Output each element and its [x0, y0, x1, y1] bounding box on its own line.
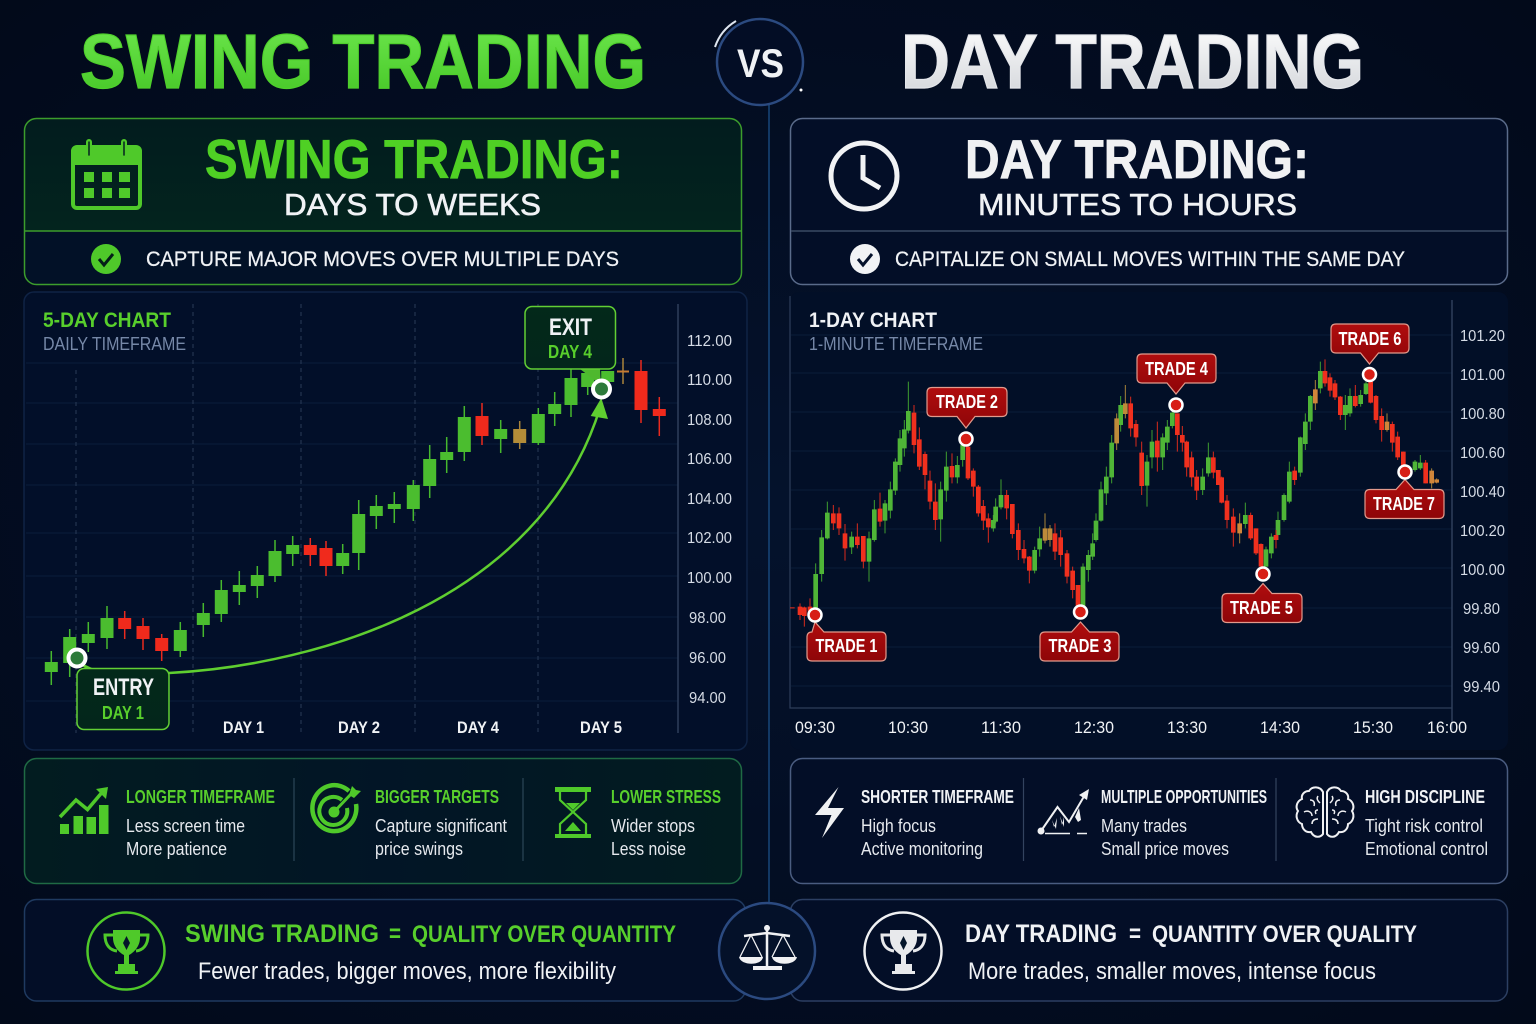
subheading: days to weeks: DAYS TO WEEKS — [284, 187, 541, 222]
time axis labels: 16:00 — [1427, 719, 1467, 737]
text: shorter timeframe: Active monitoring — [861, 839, 983, 859]
text: bigger targets — [375, 787, 507, 859]
icon: green check — [91, 244, 121, 274]
callout: trade 1: TRADE 1 — [816, 636, 878, 656]
time axis labels — [795, 719, 1467, 737]
price axis labels: 100.60 — [1460, 445, 1505, 462]
price axis labels: 112.00 — [687, 333, 732, 350]
price axis labels: 100.00 — [687, 570, 732, 587]
text: multiple opportunities: Many trades — [1101, 816, 1187, 836]
text: bigger targets: Capture significant — [375, 816, 507, 836]
icon: balance scale — [719, 903, 815, 999]
time axis labels: 10:30 — [888, 719, 928, 737]
text: longer timeframe: Less screen time — [126, 816, 245, 836]
price axis labels: 94.00 — [689, 690, 726, 707]
text: shorter timeframe: SHORTER TIMEFRAME — [861, 787, 1014, 807]
chart title: 1-day chart: 1-DAY CHART — [809, 309, 937, 332]
text: swing summary heading — [185, 920, 676, 948]
panel: swing trading summary — [24, 900, 746, 1001]
text: bigger targets: price swings — [375, 839, 463, 859]
text: multiple opportunities: Small price moves — [1101, 839, 1229, 859]
callout: trade 4 — [1137, 354, 1216, 412]
time axis labels: 12:30 — [1074, 719, 1114, 737]
candlesticks: 1-day first half — [792, 382, 1136, 627]
day axis labels: DAY 1 — [223, 718, 264, 737]
icon: calendar — [73, 142, 140, 208]
icon: green trophy — [88, 912, 164, 990]
text: day summary heading: = — [1129, 920, 1141, 948]
text: day summary: More trades, smaller moves, intense focus — [968, 958, 1376, 985]
icon: target — [312, 785, 361, 831]
text: day summary heading — [965, 920, 1417, 948]
price axis labels: 100.00 — [1460, 562, 1505, 579]
text: longer timeframe: More patience — [126, 839, 227, 859]
price axis labels: 100.20 — [1460, 523, 1505, 540]
text: longer timeframe: LONGER TIMEFRAME — [126, 787, 275, 807]
price axis labels: 108.00 — [687, 412, 732, 429]
title: swing trading: SWING TRADING — [80, 19, 646, 105]
time axis labels: 14:30 — [1260, 719, 1300, 737]
vs badge: VS — [737, 42, 784, 86]
candlesticks: 5-day — [51, 358, 659, 685]
time axis labels: 15:30 — [1353, 719, 1393, 737]
heading: day trading: DAY TRADING: — [965, 128, 1309, 190]
text: multiple opportunities — [1101, 787, 1267, 859]
text: longer timeframe — [126, 787, 275, 859]
callout: trade 7: TRADE 7 — [1373, 494, 1435, 514]
icon: growth chart — [60, 787, 108, 834]
icon: white check — [850, 244, 880, 274]
text: high discipline: Tight risk control — [1365, 816, 1483, 836]
day axis labels: DAY 2 — [338, 718, 380, 737]
time axis labels: 11:30 — [981, 719, 1021, 737]
callout: exit day 4: EXIT — [549, 314, 592, 341]
text: swing summary heading: = — [389, 920, 401, 948]
panel: 1-day chart — [790, 292, 1508, 750]
text: swing summary heading: SWING TRADING — [185, 920, 379, 948]
price axis labels: 106.00 — [687, 451, 732, 468]
callout: trade 3: TRADE 3 — [1048, 636, 1112, 656]
icon: lightning — [815, 787, 844, 838]
text: day summary heading: QUANTITY OVER QUALITY — [1152, 921, 1417, 948]
text: swing goal: CAPTURE MAJOR MOVES OVER MULTIPLE DAYS — [146, 248, 619, 271]
text: lower stress — [611, 787, 721, 859]
text: lower stress: Less noise — [611, 839, 686, 859]
arrow: entry to exit — [169, 398, 608, 673]
price axis labels: 104.00 — [687, 491, 732, 508]
title: day trading: DAY TRADING — [901, 19, 1364, 105]
text: swing summary heading: QUALITY OVER QUANTITY — [412, 921, 676, 948]
icon: white trophy — [864, 912, 942, 990]
chart subtitle: 1-minute timeframe: 1-MINUTE TIMEFRAME — [809, 334, 983, 354]
icon: clock — [831, 143, 897, 209]
callout: entry day 1 — [68, 650, 169, 730]
callout: trade 6: TRADE 6 — [1338, 329, 1402, 349]
price axis labels: 101.20 — [1460, 328, 1505, 345]
callout: exit day 4 — [525, 306, 616, 398]
price axis labels: 110.00 — [687, 372, 732, 389]
day axis labels: DAY 5 — [580, 718, 622, 737]
text: high discipline: HIGH DISCIPLINE — [1365, 787, 1485, 807]
callout: trade 4: TRADE 4 — [1145, 359, 1208, 379]
text: high discipline — [1365, 787, 1488, 859]
icon: multiple opportunities — [1038, 789, 1089, 834]
callout: entry day 1: ENTRY — [93, 674, 154, 701]
text: high discipline: Emotional control — [1365, 839, 1488, 859]
subheading: minutes to hours: MINUTES TO HOURS — [978, 187, 1297, 222]
text: shorter timeframe: High focus — [861, 816, 936, 836]
price axis labels: 99.40 — [1463, 679, 1500, 696]
text: bigger targets: BIGGER TARGETS — [375, 787, 499, 807]
vs badge — [715, 19, 803, 105]
callout: entry day 1: DAY 1 — [102, 703, 144, 723]
callout: trade 2: TRADE 2 — [936, 392, 998, 412]
callout: trade 7 — [1365, 466, 1444, 518]
panel: swing trading header — [24, 118, 742, 284]
text: shorter timeframe — [861, 787, 1014, 859]
chart title: 5-day chart: 5-DAY CHART — [43, 309, 171, 332]
callout: trade 5 — [1222, 568, 1302, 622]
callout: trade 5: TRADE 5 — [1230, 598, 1293, 618]
price axis labels: 96.00 — [689, 650, 726, 667]
price axis labels: 99.60 — [1463, 640, 1500, 657]
day axis labels — [223, 718, 622, 737]
text: lower stress: Wider stops — [611, 816, 695, 836]
price axis labels: 100.40 — [1460, 484, 1505, 501]
icon: hourglass — [555, 787, 591, 838]
price axis labels: 102.00 — [687, 530, 732, 547]
price axis labels: 101.00 — [1460, 367, 1505, 384]
icon: brain — [1297, 787, 1353, 837]
panel: day trading header — [790, 118, 1508, 284]
callout: exit day 4: DAY 4 — [548, 342, 592, 362]
day axis labels: DAY 4 — [457, 718, 499, 737]
callout: trade 2 — [927, 388, 1007, 446]
chart subtitle: daily timeframe: DAILY TIMEFRAME — [43, 334, 186, 354]
heading: swing trading days to weeks: SWING TRADING: — [205, 128, 623, 190]
time axis labels: 09:30 — [795, 719, 835, 737]
time axis labels: 13:30 — [1167, 719, 1207, 737]
price axis labels: 98.00 — [689, 610, 726, 627]
text: day goal: CAPITALIZE ON SMALL MOVES WITHIN THE SAME DAY — [895, 248, 1405, 271]
callout: trade 3 — [1040, 606, 1119, 661]
price axis labels: 100.80 — [1460, 406, 1505, 423]
callout: trade 1 — [807, 608, 886, 661]
price axis labels — [687, 333, 732, 707]
panel: swing trading benefits — [24, 758, 742, 884]
text: day summary heading: DAY TRADING — [965, 920, 1117, 948]
text: swing summary: Fewer trades, bigger moves, more flexibility — [198, 958, 616, 985]
panel: day trading traits — [790, 758, 1508, 884]
text: multiple opportunities: MULTIPLE OPPORTUNITIES — [1101, 787, 1267, 807]
candlesticks: 1-day second half — [1142, 359, 1437, 567]
text: lower stress: LOWER STRESS — [611, 787, 721, 807]
price axis labels: 99.80 — [1463, 601, 1500, 618]
panel: day trading summary — [790, 900, 1508, 1001]
price axis labels — [1460, 328, 1505, 696]
callout: trade 6 — [1331, 324, 1409, 381]
panel: 5-day chart — [24, 292, 747, 750]
